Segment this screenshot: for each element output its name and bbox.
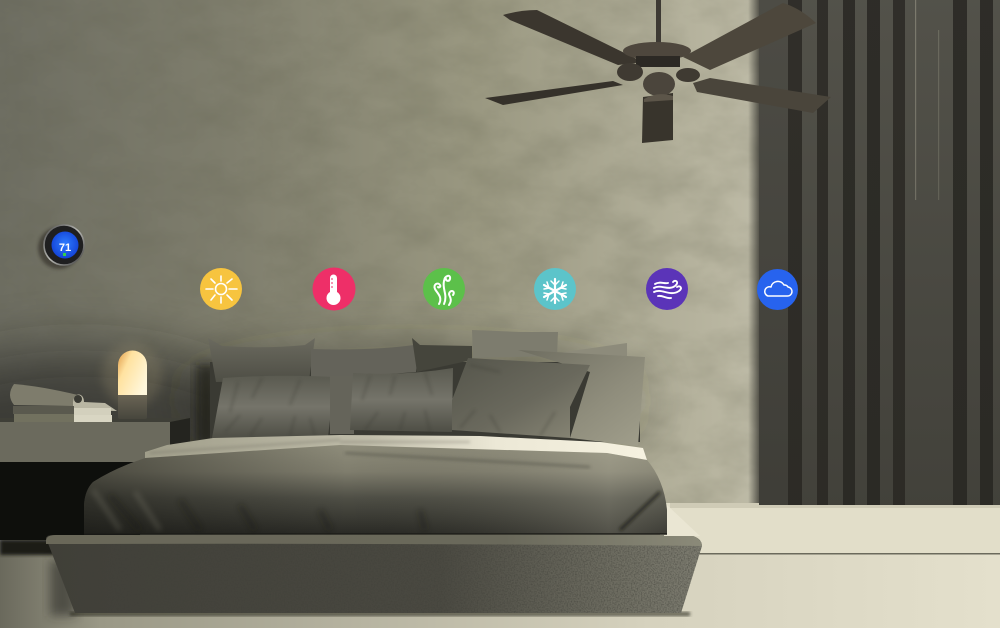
fan blade upper left: [503, 10, 643, 65]
icon: sun: [200, 268, 242, 310]
ceiling fan: [485, 0, 831, 143]
back pillow left: [208, 338, 315, 382]
lamp: [102, 343, 162, 419]
bed base top: [46, 535, 702, 546]
curtain: [759, 0, 1000, 505]
books: [10, 384, 117, 422]
back pillow right sliver: [558, 343, 627, 358]
bed base: [46, 535, 702, 613]
back pillow third: [412, 338, 472, 372]
bedside table: [0, 418, 190, 540]
fan rod: [656, 0, 661, 44]
duvet folds: [93, 453, 660, 530]
icon: cloud: [757, 269, 798, 310]
headboard and pillows: [208, 330, 645, 446]
wall: [0, 0, 770, 540]
duvet: [84, 445, 667, 534]
icon: wind: [646, 268, 688, 310]
thermostat temperature: 71: [59, 242, 71, 254]
icon: thermometer: [312, 268, 356, 310]
back pillow second: [311, 344, 419, 380]
fan blade front: [642, 93, 673, 143]
floor: [0, 503, 1000, 628]
thermostat: [38, 225, 84, 269]
icon: snowflake: [534, 268, 576, 310]
fan motor housing: [623, 42, 691, 60]
pillow right: [518, 350, 645, 446]
pillow folds: [225, 365, 555, 436]
fan blade right: [693, 78, 831, 113]
pillow small left: [212, 376, 335, 438]
back pillow raised: [472, 330, 558, 358]
sheet: [145, 435, 647, 460]
mattress end: [664, 505, 700, 536]
fan blade upper right: [683, 3, 816, 70]
pillow small center: [350, 368, 453, 432]
fan blade left: [485, 81, 623, 105]
icon: humidity swirls: [423, 268, 465, 310]
bed: [46, 435, 706, 615]
pillow front: [452, 358, 590, 438]
